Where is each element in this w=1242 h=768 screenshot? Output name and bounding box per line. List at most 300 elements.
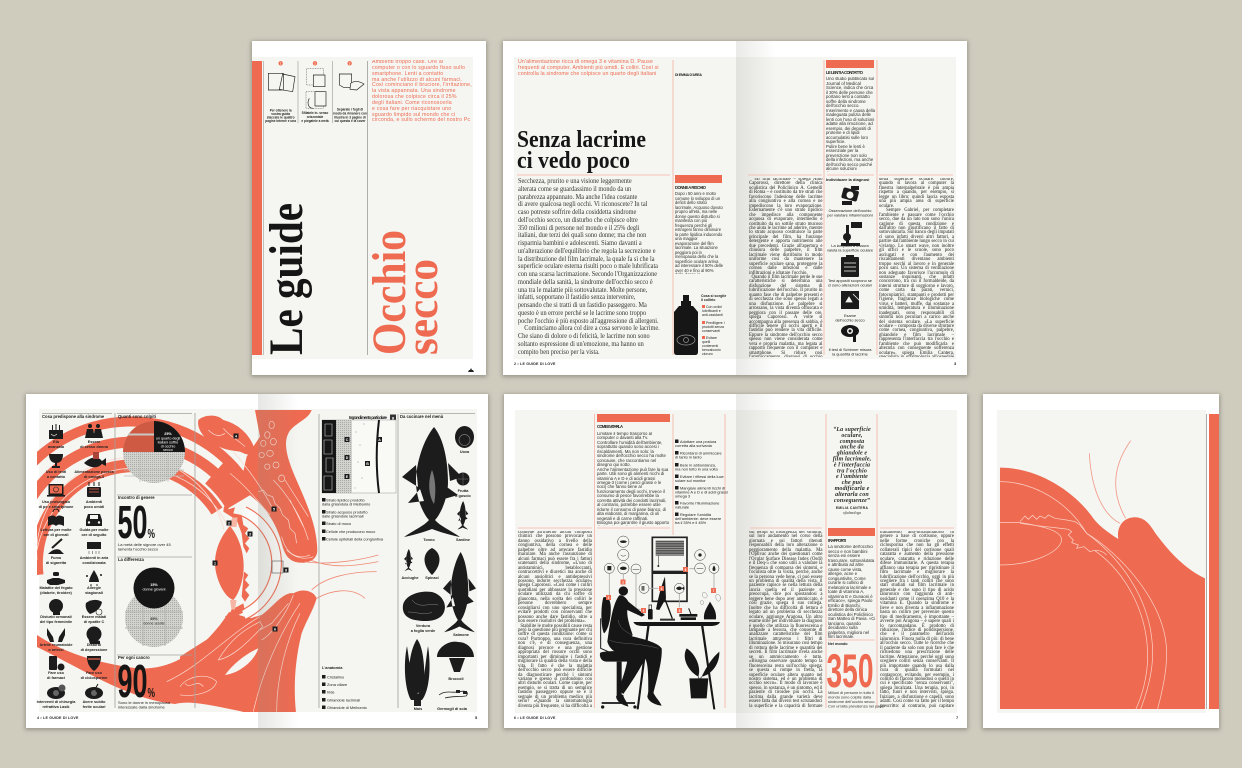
anatomy legend xyxy=(322,665,367,710)
stat: quanti sono colpiti xyxy=(118,414,185,483)
prevention checklist: Bere in abbondanza, xyxy=(680,462,716,468)
food: germogli di soia: Germogli di soia xyxy=(437,707,468,711)
magnified legend: Cellule epiteliali della congiuntiva xyxy=(326,536,384,542)
prevention checklist: tra il 35% e il 45% xyxy=(675,520,707,525)
sidebar bar: i rapporti xyxy=(828,528,875,536)
magnified legend: dalle ghiandole lacrimali xyxy=(322,514,364,518)
icon: depressione: Disturbi xyxy=(87,643,101,647)
main body text: una tra le malattie più sottovalutate. Molte persone, xyxy=(518,286,647,294)
eye drop tips: quelli xyxy=(702,340,710,344)
chair xyxy=(600,597,644,709)
icon: eye test chart xyxy=(841,291,861,309)
potted plant xyxy=(685,648,719,698)
humidifier steam xyxy=(700,592,720,605)
ciliary teeth xyxy=(223,504,249,622)
page: back cover xyxy=(983,394,1219,728)
illustration: eye detail xyxy=(1000,441,1205,709)
eyelashes xyxy=(1089,441,1131,523)
food: verdura a foglia verde: a foglia verde xyxy=(411,629,435,633)
cover intro text: la vista appannata. Una sindrome xyxy=(372,88,456,94)
window with blind xyxy=(652,537,687,601)
icon: pc: Uso prolungato xyxy=(42,500,71,504)
food: tonno: Tonno xyxy=(423,538,435,542)
main body text: risparmia bambini e adolescenti. Siamo davanti a xyxy=(518,239,641,247)
coral markers: 1 xyxy=(622,580,624,584)
article column: causes and diagnosis xyxy=(518,531,592,708)
sidebar bar: lenti a contatto xyxy=(826,60,874,68)
cover intro text: smartphone. Lenti a contatto xyxy=(372,71,443,77)
sidebar bar: come evitarla xyxy=(597,414,670,422)
pull quote: composta xyxy=(840,439,864,445)
icon: ferite oculari: ferite oculari xyxy=(83,705,105,709)
prevention checklist: naturale xyxy=(675,504,689,510)
main body text: compito ben preciso per la vista. xyxy=(518,348,599,356)
how-to step 3: illustra in 3 pagine di xyxy=(334,115,366,119)
icon: ambienti poco umidi xyxy=(84,482,104,509)
footer and page numbers xyxy=(514,715,959,720)
upper eyelid xyxy=(240,410,317,563)
diagnosis icons: Individuare la diagnosi xyxy=(826,177,869,182)
diagnosis captions: Esame xyxy=(844,313,856,318)
food: broccoli xyxy=(437,642,474,681)
illustration: eye cross-section xyxy=(15,410,378,713)
food: sardine: Sardine xyxy=(456,538,470,542)
stat: 350 million: Con un'alta prevalenza nei paesi xyxy=(828,704,884,708)
stat: 50 percent: lamenta l'occhio secco xyxy=(118,546,159,552)
desk xyxy=(633,622,720,709)
info bubbles xyxy=(604,536,719,593)
anatomy markers: 4 xyxy=(235,434,237,438)
coral markers xyxy=(606,567,716,613)
diagnosis captions xyxy=(827,208,873,356)
cover intro text: Così cominciano il bruciore, l'irritazione, xyxy=(372,82,472,88)
icon: sesso donne xyxy=(80,424,109,449)
how-to step 2 xyxy=(301,61,329,123)
pull quote: “La superficie xyxy=(833,427,871,433)
diagnosis captions: dell'occhio secco xyxy=(835,318,865,322)
how-to step 3: cui questa è la cover xyxy=(334,119,366,123)
coral rules xyxy=(517,60,953,355)
eye shape xyxy=(1000,468,1205,709)
pull quote: alterarla con xyxy=(835,492,869,498)
diagnosis captions: Il test di Schirmer misura xyxy=(829,347,872,352)
icon: pc xyxy=(39,484,73,509)
prevention checklist: solare sul monitor xyxy=(675,478,706,483)
how-to step 3: modo da rimanere con xyxy=(333,111,367,115)
pull quote: che può xyxy=(842,480,862,486)
eye drop tips: cloruro xyxy=(702,352,713,356)
icon: aria condizionata: Ambienti in aria xyxy=(80,556,109,560)
main body text: pensando che si tratti di un fastidio passeggero. Ma xyxy=(518,301,646,309)
diagnosis icons xyxy=(826,177,873,356)
headline: ci vedo poco xyxy=(517,148,630,174)
icon: omega-3: di omega-3 xyxy=(84,475,104,479)
magnified legend xyxy=(322,498,384,542)
diagnosis captions: ci sono alterazioni oculari xyxy=(828,282,872,288)
headline xyxy=(517,127,646,174)
eye inner lines xyxy=(1000,482,1167,709)
how-to step 1: Per ottenere la xyxy=(270,108,292,112)
icon: ferite oculari: Avere subito xyxy=(83,700,106,704)
venn chart: la differenza: donne giovani xyxy=(143,588,166,592)
pie chart 25 percent: secco xyxy=(163,448,173,452)
main body text: Che siano di dolore o di felicità, le lacrime non sono xyxy=(518,332,649,340)
eye drop tips: contenenti xyxy=(702,344,718,348)
lacrimal gland xyxy=(198,416,255,455)
icon: disturbi ormonali xyxy=(40,599,72,624)
stat: 90 percent: interessate dalla sindrome xyxy=(118,704,165,710)
title: secco: secco xyxy=(396,259,447,355)
anatomy legend: Iride xyxy=(327,690,335,694)
food: acciughe: Acciughe xyxy=(401,576,419,580)
how-to step 2: 2 xyxy=(314,61,316,65)
deck text xyxy=(518,59,659,77)
deck text: Un'alimentazione ricca di omega 3 e vitamina D. Pause xyxy=(518,59,653,65)
magnified particular xyxy=(322,414,396,493)
sidebar text: come evitarla xyxy=(597,432,669,526)
icon: guida xyxy=(80,514,108,537)
food: frutta a guscio: a guscio xyxy=(455,494,471,498)
pull quote xyxy=(833,427,871,515)
monitor xyxy=(656,577,666,610)
eye drop tips: conservanti xyxy=(702,329,720,333)
anatomy markers: 6 xyxy=(274,628,276,632)
page numbers and footer: 3 xyxy=(954,361,957,366)
main body text: superficie oculare esterna risulti poco o male lubrificata xyxy=(518,262,657,270)
anatomy markers: 3 xyxy=(249,532,251,536)
venn chart: la differenza: 35% xyxy=(150,617,158,621)
sidebar text: lenti a contatto: Uno studio pubblicato sul Journal of Medical Science, indica che circa il 30% delle persone che portano lenti a contatto soffre della sindrome dell'occhio secco. Inserimento e causa della inadeguata pulizia delle lenti con l'uso di soluzioni adatte alla rimozione, ad esempio, dei depositi di proteine e di lipidi accumulatisi sulle loro superficie. xyxy=(826,77,875,144)
cover intro text: computer o con lo sguardo fisso sullo xyxy=(372,65,465,71)
food: germogli di soia xyxy=(437,690,468,711)
stat: 350 million: Milioni di persone in tutto il xyxy=(828,690,874,695)
grey edge line xyxy=(1206,414,1207,709)
main body text: infatti, sopportano il fastidio senza intervenire, xyxy=(518,293,635,301)
coral side bar xyxy=(1209,414,1219,709)
stat: 50 percent: La metà delle signore over 45 xyxy=(118,542,171,547)
footer and page numbers: 6 • LE GUIDE DI LOVE xyxy=(514,716,556,720)
how-to step 1: staccate le quattro xyxy=(267,115,295,119)
eye drop tips: Cosa si sceglie xyxy=(701,294,726,298)
pie chart 25 percent: un quarto degli xyxy=(156,436,180,440)
icon: disturbi ormonali: del tipo femminile xyxy=(40,620,72,624)
icon: omega-3 xyxy=(74,452,115,479)
spread: eye anatomy xyxy=(26,394,488,728)
food: salmone: Salmone xyxy=(453,633,469,637)
eye drop tips: Evitare xyxy=(706,336,717,340)
main body text: questo è un errore perché se le lacrime sono troppo xyxy=(518,309,646,317)
white slit xyxy=(225,648,258,675)
article column: lacrimal film: «Il film lacrimale – spiega Aldo Caporossi, direttore della clinica oculistica del Policlinico A. Gemelli di Roma – è costituito da tre strati che favoriscono l'adesione delle lacrime alla congiuntiva e alla cornea e ne impediscono la loro evaporazione. Esternamente c'è uno strato lipidico che impedisce alla componente acquosa di evaporare, intermedio è costituito da un sottile strato mucoso che aiuta le lacrime ad aderire, mentre lo strato acquoso costituisce la parte principale del film, ha funzione detergente e apporta nutrimento alle due precedenti. Grazie all'apertura e chiusura delle palpebre, il film lacrimale viene distribuito in modo uniforme così da mantenere la superficie oculare sana, proteggere la cornea dalle infezioni e dalle infiltrazioni e idratare l'occhio. xyxy=(749,178,822,276)
spine shadow xyxy=(736,394,776,728)
risk factors heading: Cosa predispone alla sindrome xyxy=(42,414,105,419)
stat: 90 percent: 90 xyxy=(118,655,148,707)
footer and page number: 5 xyxy=(475,715,478,720)
icon: ambienti poco umidi: poco umidi xyxy=(84,505,104,509)
food: verdura a foglia verde xyxy=(403,592,445,633)
main body text: di avere qualcosa negli occhi. Vi riconoscete? In tal xyxy=(518,200,647,208)
main body text: con una scarsa lacrimazione. Secondo l'Organizzazione xyxy=(518,270,657,278)
diagnosis captions: valuta la superficie oculare xyxy=(827,248,873,252)
coral rules xyxy=(518,414,954,708)
eye drop tips: benzalconio xyxy=(702,348,721,352)
main body text: poche l'occhio è più esposto all'aggressione di allergeni. xyxy=(518,316,658,324)
eye outer bands xyxy=(15,421,248,575)
how-to step 2: e piegatele a metà xyxy=(301,119,329,123)
how-to step 2: orizzontale xyxy=(307,115,323,119)
pie chart 25 percent xyxy=(123,421,185,483)
connector arrows xyxy=(609,569,714,609)
prevention checklist: Evitare i riflessi della luce xyxy=(680,474,724,479)
anatomy legend: Ghiandole di Meibomio xyxy=(327,705,367,710)
coral markers: 7 xyxy=(713,589,715,593)
prevention checklist: vitamine A e D e di acidi grassi xyxy=(675,490,728,494)
magnified particular: Ingrandimento particolare xyxy=(349,415,388,420)
icon: lenti a contatto xyxy=(46,454,66,479)
food: salmone xyxy=(443,552,476,637)
magnified legend: Strato lipidico prodotto xyxy=(326,498,365,502)
eye drop tips: prodotti senza xyxy=(702,325,724,329)
icon: aria condizionata: condizionata xyxy=(82,561,106,565)
anatomy markers xyxy=(212,434,288,632)
prevention checklist: omega 3 xyxy=(675,494,690,498)
eye drop tips: Con ordini xyxy=(706,305,722,309)
icon: slit lamp xyxy=(841,222,862,246)
article column: causes and diagnosis: contiene all'interno alcuni composti chimici che possono provocare un danno ossidativo a livello della congiuntiva, della cornea e delle palpebre oltre ad arrecare fastidio maculare. Ma anche l'assunzione di alcuni farmaci può essere fra i fattori scatenanti della sindrome, «L'uso di antistaminici, betabloccanti, contraccettivi e diuretici ma anche di alcuni ansiolitici e antidepressivi possono indurre secchezza oculare» spiega Caporossi. «Così come i colliri quotidiani per abbassare la pressione oculare utilizzati da chi soffre di glaucoma, nella scelta dei colliri le persone dovrebbero sempre consigliarsi con uno specialista, per evitare prodotti con conservanti che possono anche dare fastidio, oltre a non essere risolutivi del problema». xyxy=(518,531,592,624)
cover intro text xyxy=(372,60,472,123)
magnified legend: dalla ghiandola di Meibomio xyxy=(322,502,370,506)
pull quote: film lacrimale, xyxy=(833,456,871,462)
anatomy legend: Cristallino xyxy=(327,674,344,680)
title: Occhio: Occhio xyxy=(363,230,416,355)
diagnosis captions: la quantità di lacrime xyxy=(832,352,868,356)
cover intro text: sguardo limpido sul mondo che ci xyxy=(372,112,455,118)
food: broccoli: Broccoli xyxy=(448,677,464,681)
food: frutta a guscio xyxy=(455,472,471,498)
main body text: soltanto espressione di un'emozione, ma hanno un xyxy=(518,340,643,348)
coral markers: 3 xyxy=(643,609,645,613)
stat: 350 million: 350 xyxy=(826,644,874,697)
magnified tissue diagram: D xyxy=(346,456,349,460)
icon: malattie xyxy=(39,572,73,595)
cover intro text: degli italiani. Come riconoscerla xyxy=(372,100,452,106)
main body text: parabrezza appannato. Ma anche l'idea costante xyxy=(518,192,637,200)
logo mark xyxy=(468,368,474,372)
anatomy markers: 5 xyxy=(273,508,275,512)
magnified tissue diagram: B xyxy=(366,462,369,466)
risk factor icons xyxy=(37,424,115,709)
icon: chirurgia lasik: Interventi di chirurgia xyxy=(37,700,76,704)
eyelashes xyxy=(305,555,378,598)
food: mais xyxy=(405,639,430,711)
cover intro text: circonda, e sullo schermo del nostro Pc xyxy=(372,117,470,123)
stat: 350 million: sindrome dell'occhio secco. xyxy=(828,699,875,704)
woman figure xyxy=(607,586,662,707)
icon: aria condizionata xyxy=(80,542,109,565)
deck text: controlla la sindrome che colpisce un quarto degli italiani xyxy=(518,71,656,77)
page numbers and footer: 2 • LE GUIDE DI LOVE xyxy=(514,362,556,366)
icon: questionnaire clipboard xyxy=(841,255,859,277)
main body text: la distribuzione del film lacrimale, la quale fa sì che la xyxy=(518,254,654,262)
pull quote: anche da xyxy=(840,445,864,451)
food: verdura a foglia verde: Verdura xyxy=(416,624,431,628)
main body text: Cominciamo allora col dire a cosa servono le lacrime. xyxy=(524,324,659,332)
cornea xyxy=(242,610,248,620)
diagnosis captions: Osservazione dell'occhio xyxy=(829,208,871,213)
byline: DI EMMA D'AREA xyxy=(675,73,702,77)
how-to step 1 xyxy=(265,61,296,123)
magnified tissue diagram: E xyxy=(346,475,349,479)
foods illustrations xyxy=(401,426,476,711)
icon: mani artrite xyxy=(40,628,72,652)
surrounding eyelids xyxy=(167,410,317,713)
icon: ambienti poco umidi: Ambienti xyxy=(86,500,102,504)
icon: epatite: di epatite C xyxy=(84,620,104,624)
icon: allergie xyxy=(85,570,103,595)
pull quote: ghiandole e xyxy=(836,451,867,457)
icon: epatite: Essere malati xyxy=(82,615,106,619)
magnified legend: Strato acquoso prodotto xyxy=(326,510,368,514)
food: tonno xyxy=(402,427,462,542)
diagnosis captions: La lampada a fessura xyxy=(831,243,870,248)
icon: chirurgia lasik xyxy=(37,684,76,709)
pull quote: EMILIA CANTERA xyxy=(836,506,868,510)
lower eyelid xyxy=(180,591,317,713)
spread: come evitarla xyxy=(504,394,967,728)
stat: 50 percent: 50 xyxy=(118,496,148,548)
magnified legend: Strato di muco xyxy=(326,521,351,526)
footer and page numbers: 7 xyxy=(956,715,959,720)
deck text: frequenti al computer. Ambienti più umidi. E colliri. Così si xyxy=(518,65,659,71)
pull quote: e l'ambiente xyxy=(836,474,868,480)
coral markers: 5 xyxy=(679,609,681,613)
food: sardine xyxy=(456,501,470,542)
food: spinaci xyxy=(424,548,440,580)
eye drop tips: lubrificanti e xyxy=(702,309,721,313)
prevention checklist: Ricordarsi di ammiccare xyxy=(680,450,722,456)
icon: farmaci: di farmaci xyxy=(47,676,65,680)
pull quote: conseguenze” xyxy=(834,498,870,504)
venn chart: la differenza xyxy=(118,557,183,647)
food: frutta a guscio: Frutta xyxy=(458,489,469,493)
anatomy markers: 1 xyxy=(214,562,216,566)
icon: fumo: Fumo xyxy=(51,556,62,560)
stat: 50 percent: % xyxy=(148,526,155,541)
sidebar heading: lenti a contatto: LE LENTI A CONTATTO xyxy=(826,70,864,75)
foods heading: Da cucinare nel menù xyxy=(400,414,444,419)
magnified particular: 8 xyxy=(392,415,395,420)
icon: chirurgia lasik: refrattiva Lasik xyxy=(42,705,70,709)
how-to step 1: 1 xyxy=(280,61,282,65)
icon: lettura xyxy=(40,509,72,537)
cover intro text: dolorosa che colpisce circa il 25% xyxy=(372,94,457,100)
icon: omega-3: Alimentazione povera xyxy=(74,470,115,474)
icon: guida: Guida per molte xyxy=(80,528,108,532)
main body text: mondiale della sanità, la sindrome dell'occhio secco è xyxy=(518,278,652,286)
article column: lacrimal film xyxy=(749,178,822,357)
magnified tissue diagram xyxy=(322,420,396,493)
icon: mani artrite: Artrite reumatoide xyxy=(40,643,72,647)
coral side bar xyxy=(252,61,262,355)
pull quote: oculare, xyxy=(841,433,863,439)
sidebar heading: come evitarla: COME EVITARLA xyxy=(597,424,623,429)
diagnosis captions: per valutare infiammazioni xyxy=(827,212,873,218)
magnified tissue diagram: A xyxy=(378,438,381,442)
icon: lenti a contatto: a contatto xyxy=(47,475,66,479)
icon: ciclosporine: di ciclosporine xyxy=(81,676,107,680)
icon: sesso donne: di sesso donna xyxy=(80,445,109,449)
icon: allergie: Allergie xyxy=(87,586,101,590)
stat: quanti sono colpiti: Quanti sono colpiti xyxy=(118,414,156,419)
anatomy legend: L'anatomia xyxy=(322,665,343,670)
title: Le guide: Le guide xyxy=(260,203,313,355)
prevention checklist: Adottare una postura xyxy=(680,439,717,444)
column dividers xyxy=(264,61,368,355)
headline: Senza lacrime xyxy=(517,127,646,153)
venn chart: la differenza: La differenza xyxy=(118,557,144,562)
sidebar text: come evitarla: Anche l'alimentazione può fare la sua parte. Utili sono gli alimenti ricchi di vitamina A e D e di acidi grassi omega-3 (come i pesci grassi e le noci) che fanno bene al funzionamento degli occhi. Invece il consumo di pesce favorirebbe la corretta attività dei condotti lacrimali, al contrario, potrebbe essere utile ridurre il consumo di pane bianco, di alta elaborati, di margarina, di oli vegetali e di carne raffinati. xyxy=(597,467,668,521)
magnified legend: Cellule che producono muco xyxy=(326,529,375,534)
gland cells and white details xyxy=(167,421,313,712)
main body text: un'alterazione dell'equilibrio che regola la secrezione e xyxy=(518,247,655,255)
how-to step 1: vostra guida xyxy=(271,112,290,116)
main body text: caso potreste soffrire della cosiddetta sindrome xyxy=(518,208,636,216)
icon: disturbi ormonali: Disturbi ormonali xyxy=(40,615,72,619)
prevention checklist: corretta alla scrivania xyxy=(675,443,713,448)
icon: fumo xyxy=(46,539,67,565)
pie chart 25 percent: italiani soffre xyxy=(158,440,178,444)
venn chart: la differenza: 15% xyxy=(150,583,158,587)
sidebar text: come evitarla: Limitare il tempo trascorso al computer o davanti alla Tv. Controllare l'umidità dell'ambiente, soprattutto quando sono accesi i riscaldamenti. Ma non solo: la sindrome dell'occhio secco ha molte concause, che raccontiamo nel disegno qui sotto. xyxy=(597,432,666,467)
icon: depressione: di depressione xyxy=(81,648,107,652)
page numbers and footer xyxy=(514,361,957,366)
icon: schirmer test eye xyxy=(841,325,859,342)
pie chart 25 percent: di occhio xyxy=(161,444,175,448)
stat: 350 million: Nel mondo xyxy=(828,642,848,646)
illustration: woman at desk xyxy=(600,536,720,709)
pull quote: tra l'occhio xyxy=(837,468,867,474)
icon: mani artrite: o artrosi xyxy=(48,648,64,652)
main body text: italiani, due terzi dei quali sono donne; ma che non xyxy=(518,231,646,239)
page: guide cover and instructions xyxy=(252,41,486,375)
how-to step 3: Separate i fogli di xyxy=(337,108,363,112)
footer and page number: 4 • LE GUIDE DI LOVE xyxy=(37,716,79,720)
cover intro text: e cosa fare per riacquistare uno xyxy=(372,106,451,112)
spine shadow xyxy=(258,394,298,728)
prevention checklist: ma non tutto in una volta xyxy=(675,466,718,472)
icon: lettura: Lettura per molte xyxy=(40,528,72,532)
diagnosis captions: Test appositi scoprono se xyxy=(828,278,872,283)
icon: guida: ore di seguito xyxy=(82,533,107,537)
stat: 50 percent: Incontro di genere xyxy=(118,495,155,500)
icon: lettura: ore di giornali xyxy=(43,533,69,537)
desk objects xyxy=(648,602,716,620)
icon: età avanzata xyxy=(48,424,65,449)
how-to step 1: pagine interne e una xyxy=(265,119,296,123)
how-to step 3: 3 xyxy=(349,61,351,65)
venn chart: la differenza: donne adulte xyxy=(143,622,165,626)
eye drop tips: Prediligere i xyxy=(706,321,725,325)
icon: depressione xyxy=(81,626,107,652)
food: spinaci: Spinaci xyxy=(425,576,439,580)
icon: età avanzata: Età xyxy=(53,440,60,444)
eye lower band xyxy=(37,612,262,712)
pull quote: oftalmologa xyxy=(843,511,861,515)
prevention checklist: di tanto in tanto xyxy=(675,454,702,460)
pull quote: è l'interfaccia xyxy=(834,462,870,468)
stat: 90 percent: Sono le donne in menopausa xyxy=(118,700,171,705)
anatomy markers: 8 xyxy=(285,568,287,572)
